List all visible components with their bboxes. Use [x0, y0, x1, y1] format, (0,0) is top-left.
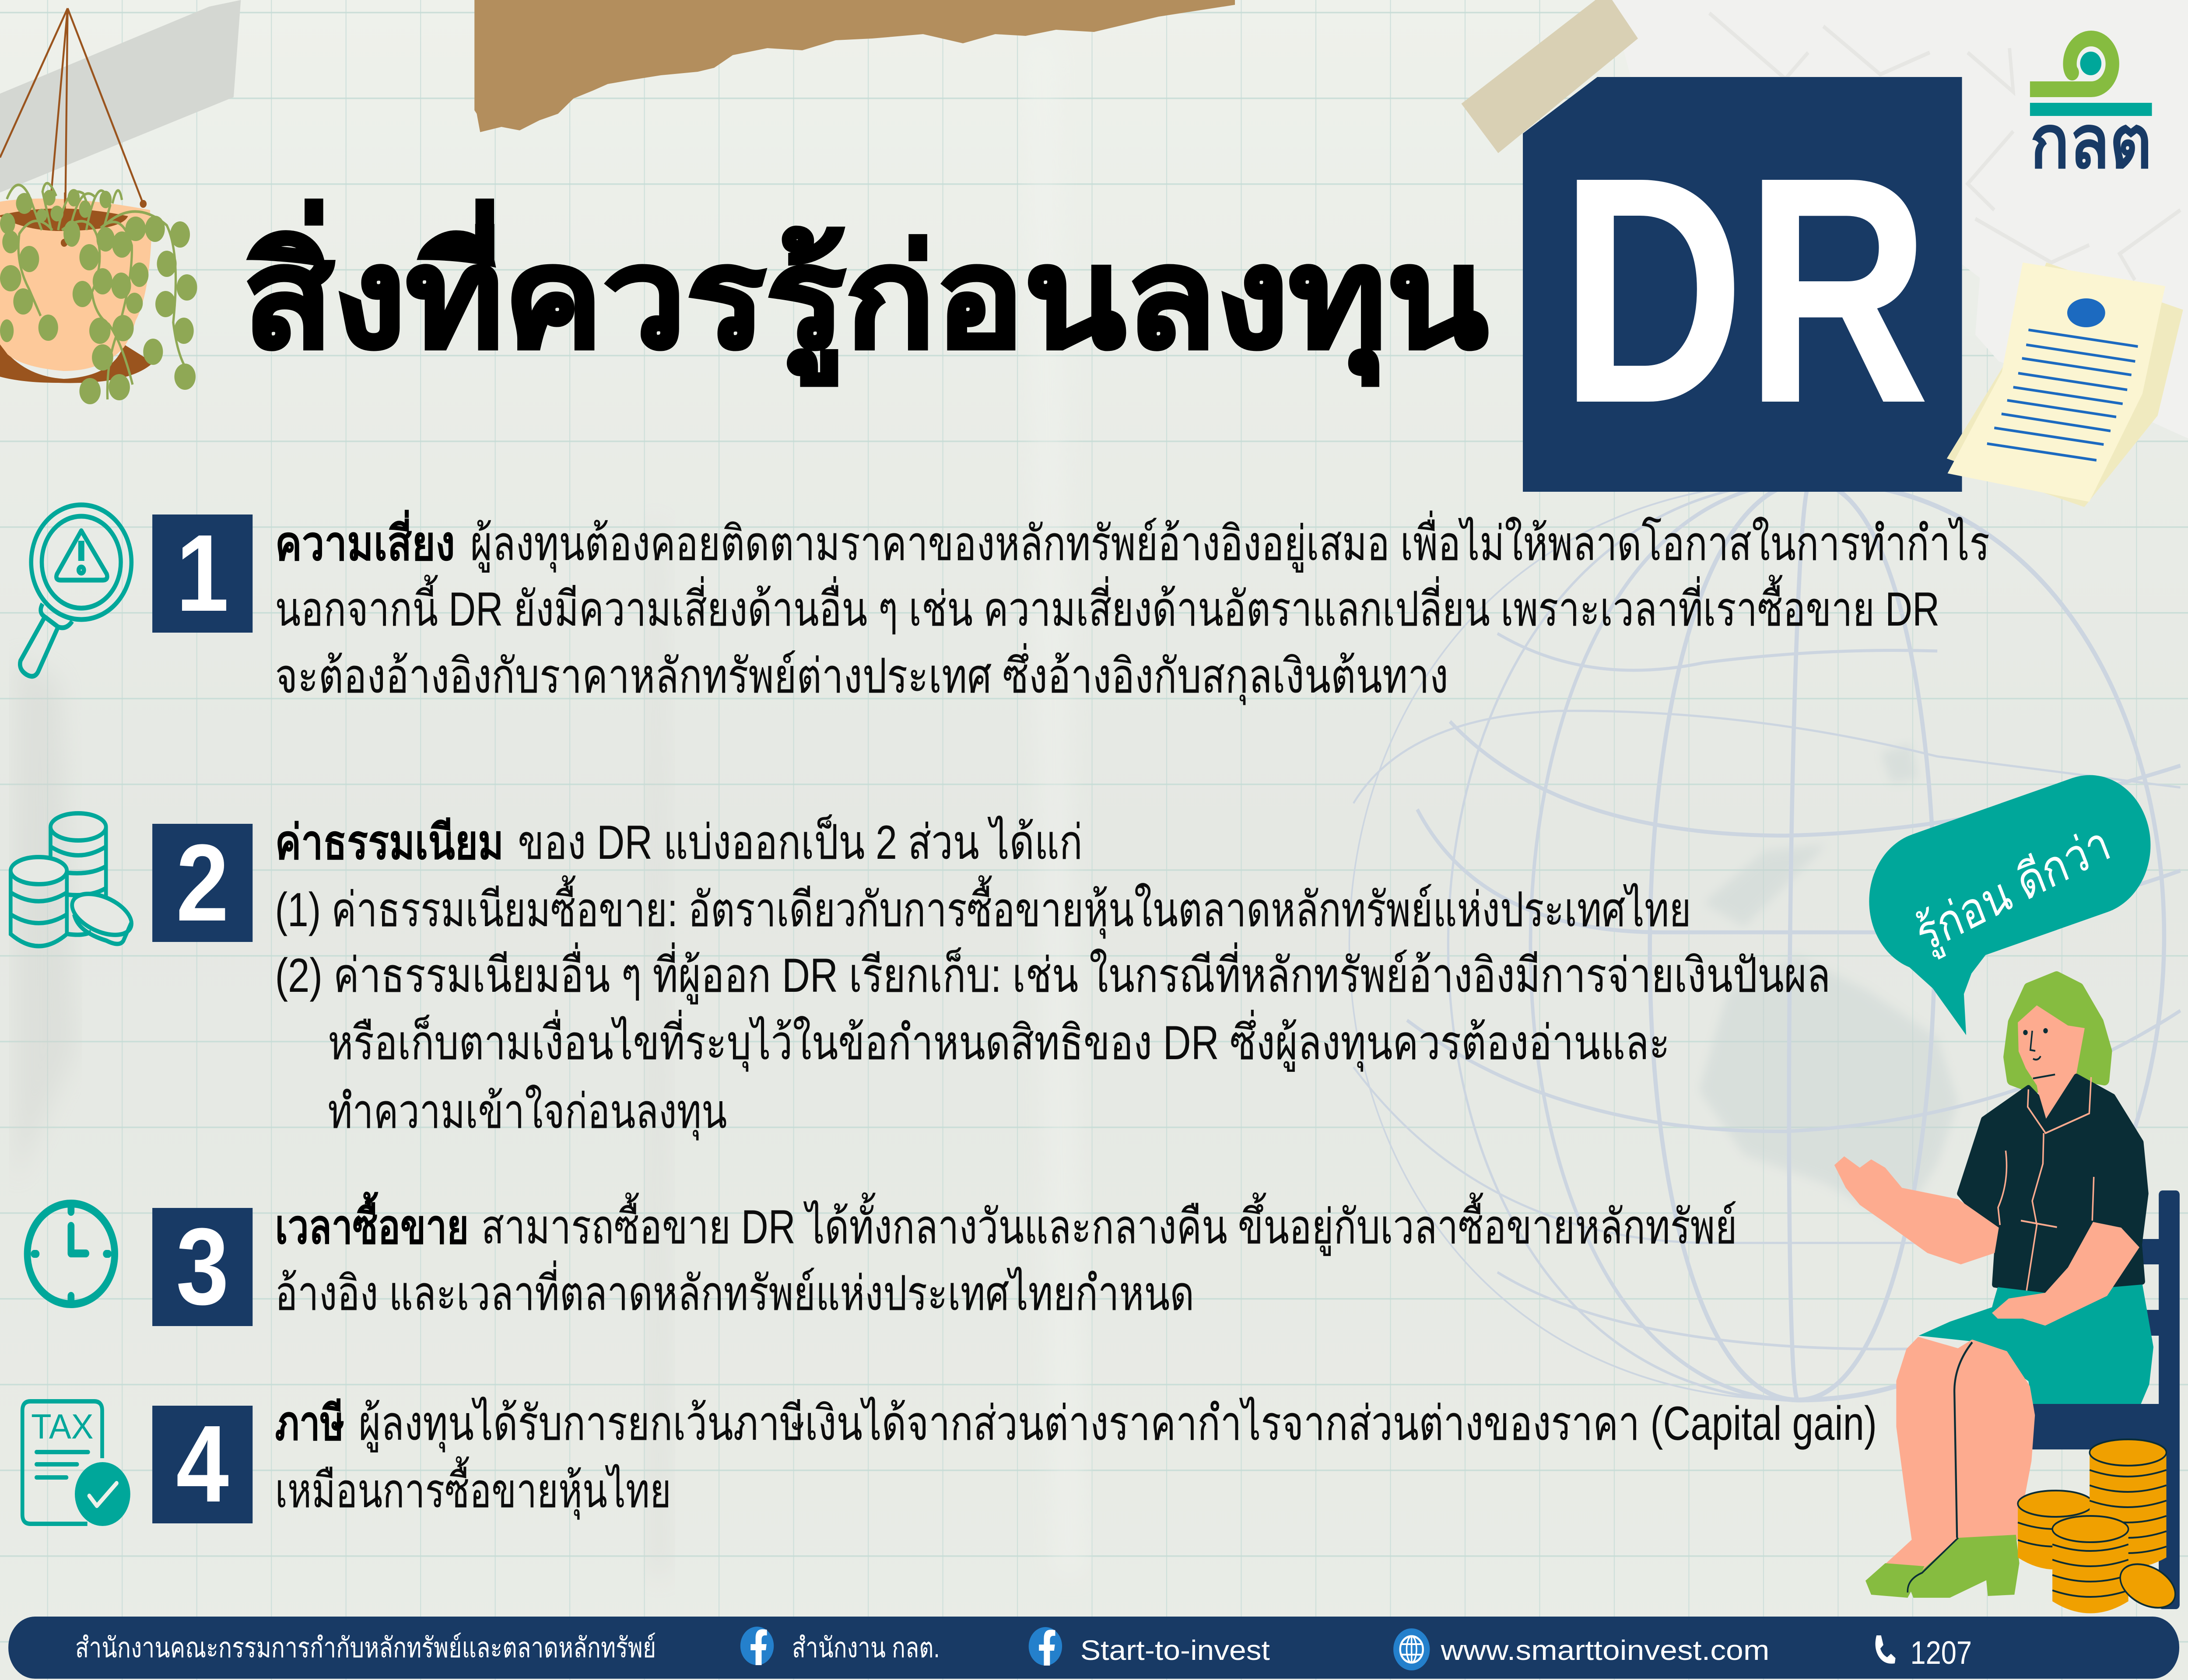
torn brown paper, top [474, 0, 1235, 132]
text: risk: ความเสี่ยง [275, 510, 455, 570]
item 1: risk [20, 505, 1990, 705]
text: fees: ของ DR แบ่งออกเป็น 2 ส่วน ได้แก่ [518, 814, 1083, 869]
number 1: 1 [176, 512, 229, 634]
text: fees: (1) ค่าธรรมเนียมซื้อขาย: อัตราเดียวกับการซื้อขายหุ้นในตลาดหลักทรัพย์แห่งประเทศไทย [275, 875, 1691, 939]
footer bar: สำนักงาน กลต. [792, 1632, 940, 1663]
icon: facebook [1029, 1627, 1062, 1666]
chair [2025, 1190, 2180, 1609]
text: fees [275, 814, 1830, 1141]
notepaper illustration [1947, 262, 2183, 507]
arm pointing [1834, 1156, 1999, 1264]
number 3: 3 [176, 1205, 229, 1327]
text: tax: ผู้ลงทุนได้รับการยกเว้นภาษีเงินได้จากส่วนต่างราคากำไรจากส่วนต่างของราคา (Capital gain) [358, 1396, 1877, 1452]
speech bubble [1854, 758, 2166, 1035]
speech bubble: รู้ก่อน ดีกว่า [1909, 816, 2118, 965]
text: risk: จะต้องอ้างอิงกับราคาหลักทรัพย์ต่างประเทศ ซึ่งอ้างอิงกับสกุลเงินต้นทาง [275, 643, 1448, 705]
tape: grey, top left [0, 0, 241, 192]
shirt [1960, 1077, 2146, 1296]
globe watermark [1349, 481, 2181, 1400]
DR title box: DR [1560, 110, 1930, 470]
text: trading hours: อ้างอิง และเวลาที่ตลาดหลักทรัพย์แห่งประเทศไทยกำหนด [275, 1260, 1194, 1320]
tape: beige [1461, 0, 1638, 153]
title: สิ่งที่ควรรู้ก่อนลงทุน [243, 200, 1488, 386]
skirt [1919, 1284, 2153, 1404]
text: fees: ทำความเข้าใจก่อนลงทุน [328, 1085, 727, 1141]
number 2: 2 [176, 822, 229, 944]
icon: web globe [1393, 1628, 1430, 1670]
footer bar: 1207 [1910, 1634, 1972, 1671]
icon: clock [27, 1204, 115, 1304]
number 4 [152, 1403, 252, 1525]
gold coins [2018, 1439, 2181, 1616]
text: fees: หรือเก็บตามเงื่อนไขที่ระบุไว้ในข้อกำหนดสิทธิของ DR ซึ่งผู้ลงทุนควรต้องอ่านและ [328, 1010, 1670, 1072]
text: risk: นอกจากนี้ DR ยังมีความเสี่ยงด้านอื่น ๆ เช่น ความเสี่ยงด้านอัตราแลกเปลี่ยน เพราะเวลาที่เราซื้อขาย DR [275, 575, 1939, 636]
woman illustration [1834, 977, 2153, 1598]
icon: magnifier with warning [20, 505, 131, 676]
item 3: trading hours [27, 1191, 1737, 1327]
text: tax: เหมือนการซื้อขายหุ้นไทย [275, 1456, 671, 1520]
text: trading hours: เวลาซื้อขาย [275, 1191, 469, 1253]
face [2018, 1005, 2085, 1131]
item 2: fees [11, 813, 1830, 1141]
text: tax: ภาษี [275, 1396, 344, 1450]
text: risk [275, 510, 1990, 705]
number 3 [152, 1205, 252, 1327]
hair [2008, 977, 2107, 1088]
shoes [1865, 1535, 2020, 1598]
footer bar [8, 1617, 2179, 1679]
arm resting [1992, 1222, 2139, 1326]
icon: facebook [740, 1627, 774, 1665]
text: fees: ค่าธรรมเนียม [275, 816, 504, 869]
text: trading hours [275, 1191, 1737, 1320]
number 2 [152, 822, 252, 944]
icon: tax document [22, 1401, 130, 1526]
icon: phone [1876, 1635, 1896, 1664]
text: risk: ผู้ลงทุนต้องคอยติดตามราคาของหลักทรัพย์อ้างอิงอยู่เสมอ เพื่อไม่ให้พลาดโอกาสในการทำกำไร [470, 511, 1990, 573]
number 4: 4 [176, 1403, 229, 1525]
footer bar: สำนักงานคณะกรรมการกำกับหลักทรัพย์และตลาดหลักทรัพย์ [75, 1632, 656, 1663]
text: fees: (2) ค่าธรรมเนียมอื่น ๆ ที่ผู้ออก DR เรียกเก็บ: เช่น ในกรณีที่หลักทรัพย์อ้างอิงมีการจ่ายเงินปันผล [275, 942, 1830, 1004]
icon: coin stacks [11, 813, 136, 946]
crumpled white paper, top right [1611, 0, 2188, 438]
text: trading hours: สามารถซื้อขาย DR ได้ทั้งกลางวันและกลางคืน ขึ้นอยู่กับเวลาซื้อขายหลักทรัพย์ [481, 1193, 1737, 1256]
icon: tax document: TAX [31, 1407, 94, 1446]
text: tax [275, 1396, 1877, 1520]
SEC logo [2030, 38, 2152, 183]
number 1 [152, 512, 252, 634]
item 4: tax [22, 1396, 1877, 1526]
footer bar: www.smarttoinvest.com [1440, 1634, 1769, 1666]
SEC logo: กลต [2030, 100, 2152, 183]
footer bar: Start-to-invest [1080, 1634, 1270, 1666]
legs [1885, 1339, 2034, 1569]
hanging plant illustration [0, 8, 197, 404]
